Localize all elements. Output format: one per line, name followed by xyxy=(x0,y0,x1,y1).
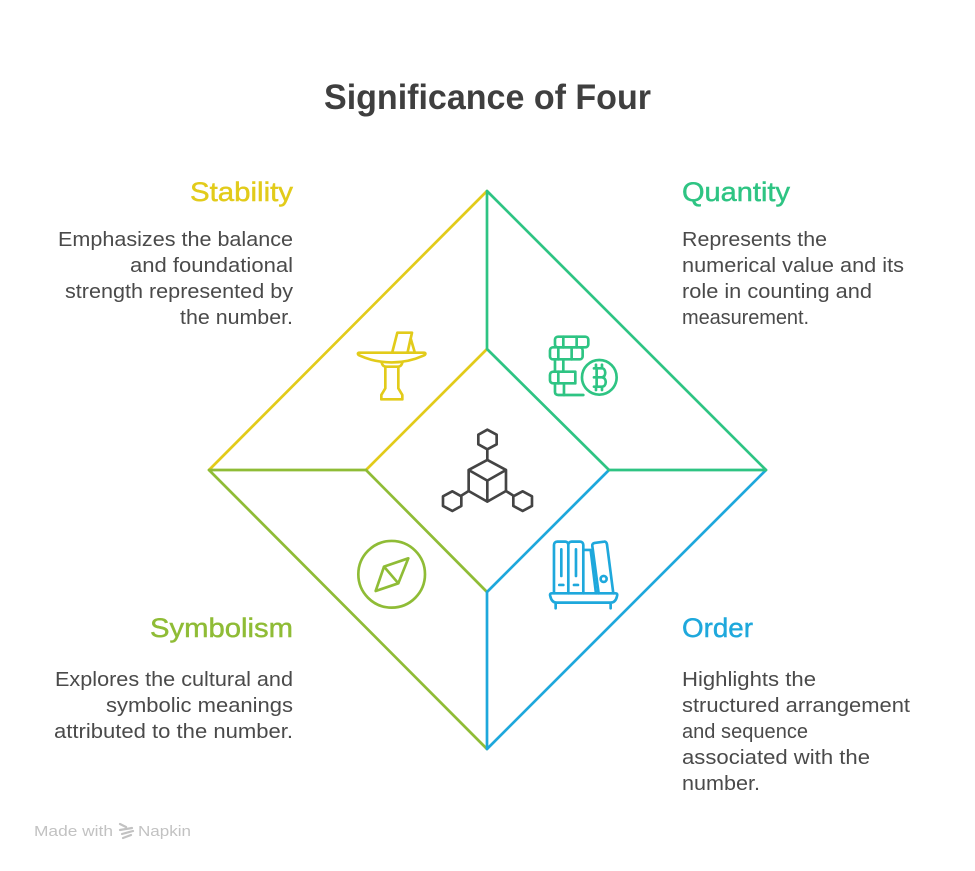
icon: napkin logo xyxy=(120,824,133,838)
footer: made with napkin: Made with xyxy=(34,823,113,840)
description: symbolism: Explores the cultural and xyxy=(55,669,293,691)
text block: stability xyxy=(58,177,294,329)
description: stability: the number. xyxy=(180,307,293,329)
icon: coin stack xyxy=(550,337,617,395)
description: order xyxy=(682,669,910,795)
footer: made with napkin: Napkin xyxy=(138,823,191,840)
description: quantity: numerical value and its xyxy=(682,255,904,277)
icon: hexagon network cube xyxy=(443,430,532,511)
heading: symbolism: Symbolism xyxy=(150,613,293,643)
diamond diagram xyxy=(209,191,766,749)
icon: compass xyxy=(358,541,425,608)
icon: balance stand xyxy=(358,333,425,399)
description: order: structured arrangement xyxy=(682,695,910,717)
description: symbolism xyxy=(54,669,293,743)
text block: symbolism xyxy=(54,613,293,743)
description: stability: strength represented by xyxy=(65,281,293,303)
description: symbolism: symbolic meanings xyxy=(106,695,293,717)
segment: order xyxy=(487,470,766,749)
description: stability xyxy=(58,229,293,329)
text block: quantity xyxy=(682,177,904,329)
title: Significance of Four xyxy=(324,77,651,117)
heading: stability: Stability xyxy=(190,177,294,207)
segment: stability xyxy=(209,191,487,470)
description: order: number. xyxy=(682,773,760,795)
description: quantity xyxy=(682,229,904,329)
description: order: Highlights the xyxy=(682,669,816,691)
description: quantity: role in counting and xyxy=(682,281,872,303)
description: quantity: Represents the xyxy=(682,229,827,251)
icon: books on shelf xyxy=(550,542,617,608)
heading: order: Order xyxy=(682,613,753,643)
description: order: associated with the xyxy=(682,747,870,769)
footer: made with napkin xyxy=(34,823,191,840)
segment: symbolism xyxy=(209,470,487,749)
description: stability: and foundational xyxy=(130,255,293,277)
description: stability: Emphasizes the balance xyxy=(58,229,293,251)
segment: quantity xyxy=(487,191,766,470)
description: symbolism: attributed to the number. xyxy=(54,721,293,743)
description: quantity: measurement. xyxy=(682,307,809,329)
heading: quantity: Quantity xyxy=(682,177,791,207)
description: order: and sequence xyxy=(682,721,808,743)
text block: order xyxy=(682,613,910,795)
